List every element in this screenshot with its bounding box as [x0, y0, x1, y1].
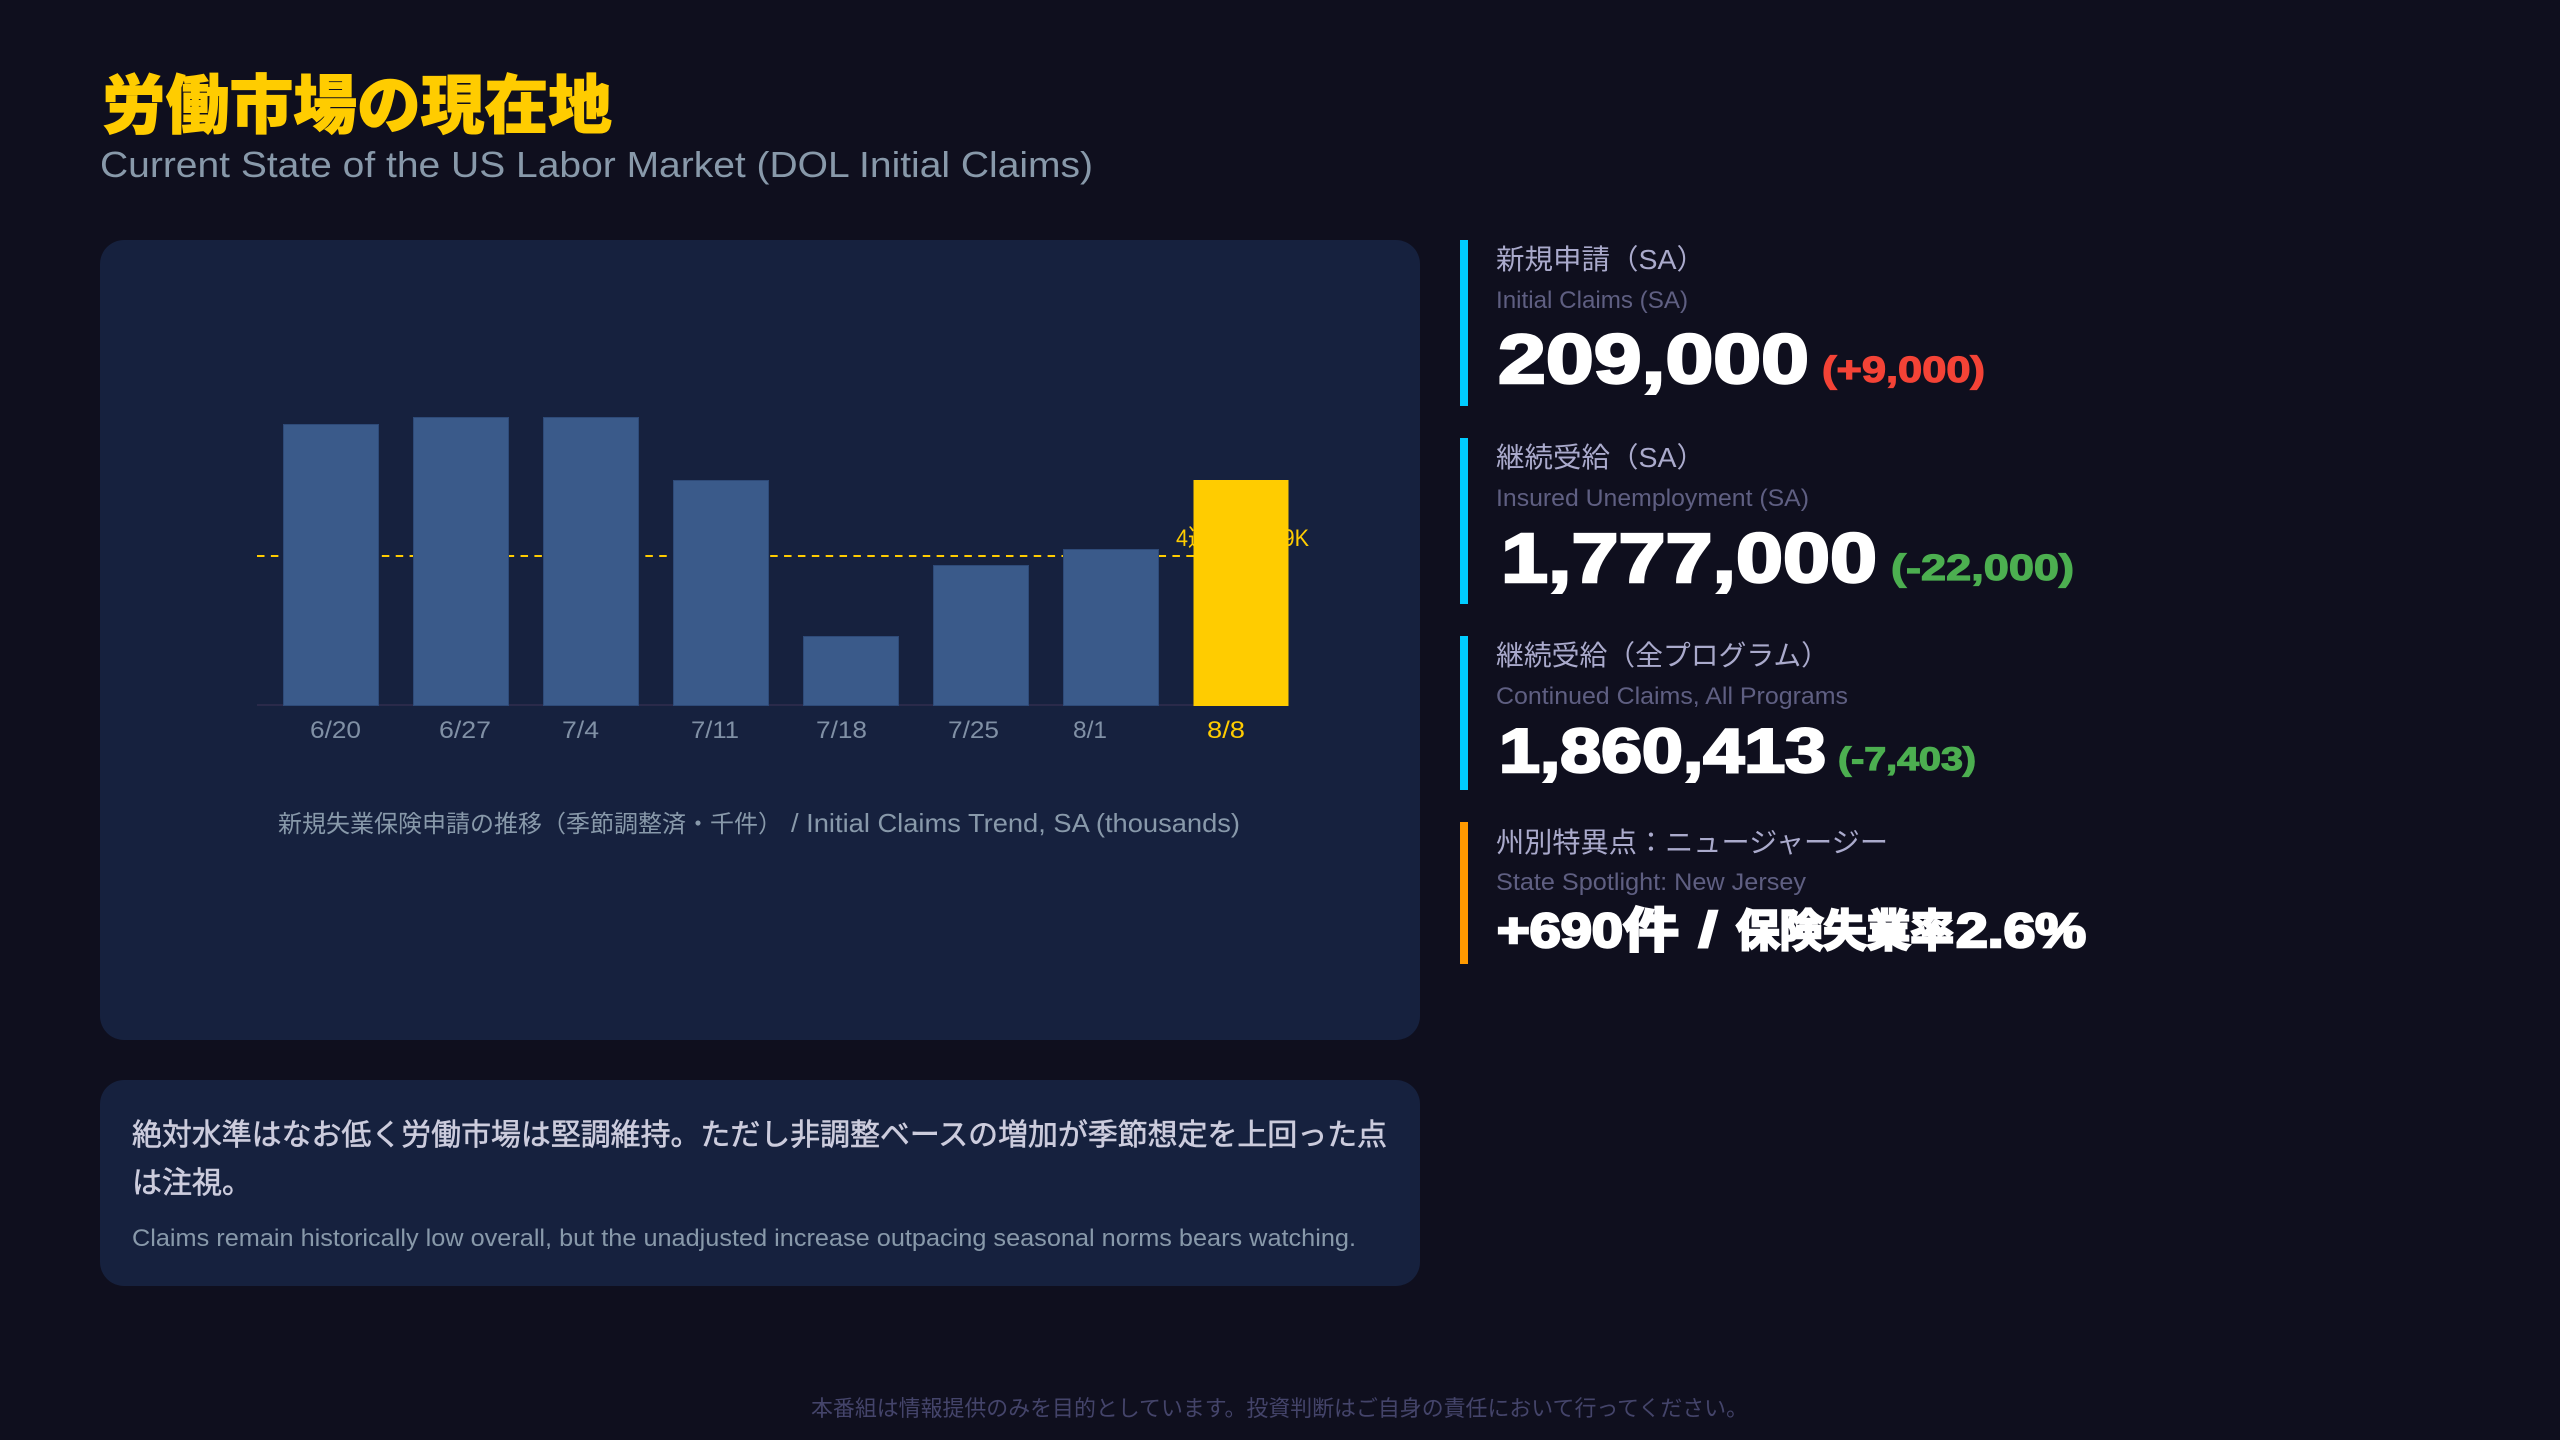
chart caption: / Initial Claims Trend, SA (thousands): [791, 808, 1240, 838]
chart: x-axis date labels: [310, 717, 1245, 744]
delta: (-7,403): [1838, 741, 1976, 777]
subtitle: Current State of the US Labor Market (DOL Initial Claims): [100, 144, 1093, 185]
chart: x-axis date labels: 8/1: [1073, 717, 1107, 744]
panel: insight: [100, 1080, 1420, 1286]
chart: x-axis date labels: 8/8: [1207, 717, 1245, 744]
label: 継続受給（全プログラム）: [1496, 640, 1829, 671]
chart caption: [278, 808, 1240, 838]
label: 州別特異点：ニュージャージー: [1496, 827, 1888, 858]
value: [1497, 902, 2086, 958]
insight: Japanese text: は注視。: [132, 1167, 252, 1200]
chart caption: 新規失業保険申請の推移（季節調整済・千件）: [278, 811, 782, 838]
English label: State Spotlight: New Jersey: [1496, 869, 1806, 896]
insight: Japanese text: [132, 1119, 1387, 1200]
delta: (-22,000): [1891, 547, 2074, 588]
value: +690件: [1497, 905, 1679, 958]
chart: x-axis date labels: 6/20: [310, 717, 361, 744]
chart: x-axis date labels: 7/25: [948, 717, 999, 744]
value: 2.6%: [1956, 905, 2086, 958]
label: 新規申請（SA）: [1496, 244, 1705, 275]
bar chart: weekly bars: [284, 418, 1158, 706]
accent bar: [1460, 438, 1468, 604]
English label: Insured Unemployment (SA): [1496, 485, 1809, 512]
value: 1,777,000: [1501, 519, 1877, 597]
value: 209,000: [1498, 320, 1809, 398]
panel: chart: [100, 240, 1420, 1040]
chart: x-axis date labels: 7/18: [816, 717, 867, 744]
value: 保険失業率: [1736, 907, 1954, 956]
accent bar: [1460, 636, 1468, 790]
insight: English text: Claims remain historically low overall, but the unadjusted increase outpacing seasonal norms bears watching.: [132, 1225, 1356, 1252]
stat card: continued claims all programs: [1460, 636, 1976, 790]
insight: Japanese text: 絶対水準はなお低く労働市場は堅調維持。ただし非調整ベースの増加が季節想定を上回った点: [132, 1119, 1387, 1152]
delta: (+9,000): [1822, 349, 1985, 390]
chart: x-axis date labels: 6/27: [439, 717, 491, 744]
chart: average label: 4週平均 199K: [1176, 525, 1309, 552]
chart: baseline axis: [257, 704, 1288, 706]
value: 1,860,413: [1499, 717, 1826, 786]
English label: Initial Claims (SA): [1496, 287, 1688, 314]
chart: x-axis date labels: 7/11: [691, 717, 739, 744]
stat card: insured unemployment: [1460, 438, 2074, 604]
chart: x-axis date labels: 7/4: [562, 717, 599, 744]
stat card: initial claims: [1460, 240, 1985, 406]
title: 労働市場の現在地: [102, 70, 612, 142]
accent bar: [1460, 240, 1468, 406]
accent bar: [1460, 822, 1468, 964]
label: 継続受給（SA）: [1496, 442, 1705, 473]
English label: Continued Claims, All Programs: [1496, 683, 1848, 710]
stat card: state spotlight: [1460, 822, 2086, 964]
bar: latest week highlighted: [1194, 480, 1288, 706]
value: /: [1698, 902, 1718, 958]
chart: dashed 4-week average line: [257, 555, 1288, 557]
footer disclaimer: 本番組は情報提供のみを目的としています。投資判断はご自身の責任において行ってください。: [811, 1396, 1748, 1421]
